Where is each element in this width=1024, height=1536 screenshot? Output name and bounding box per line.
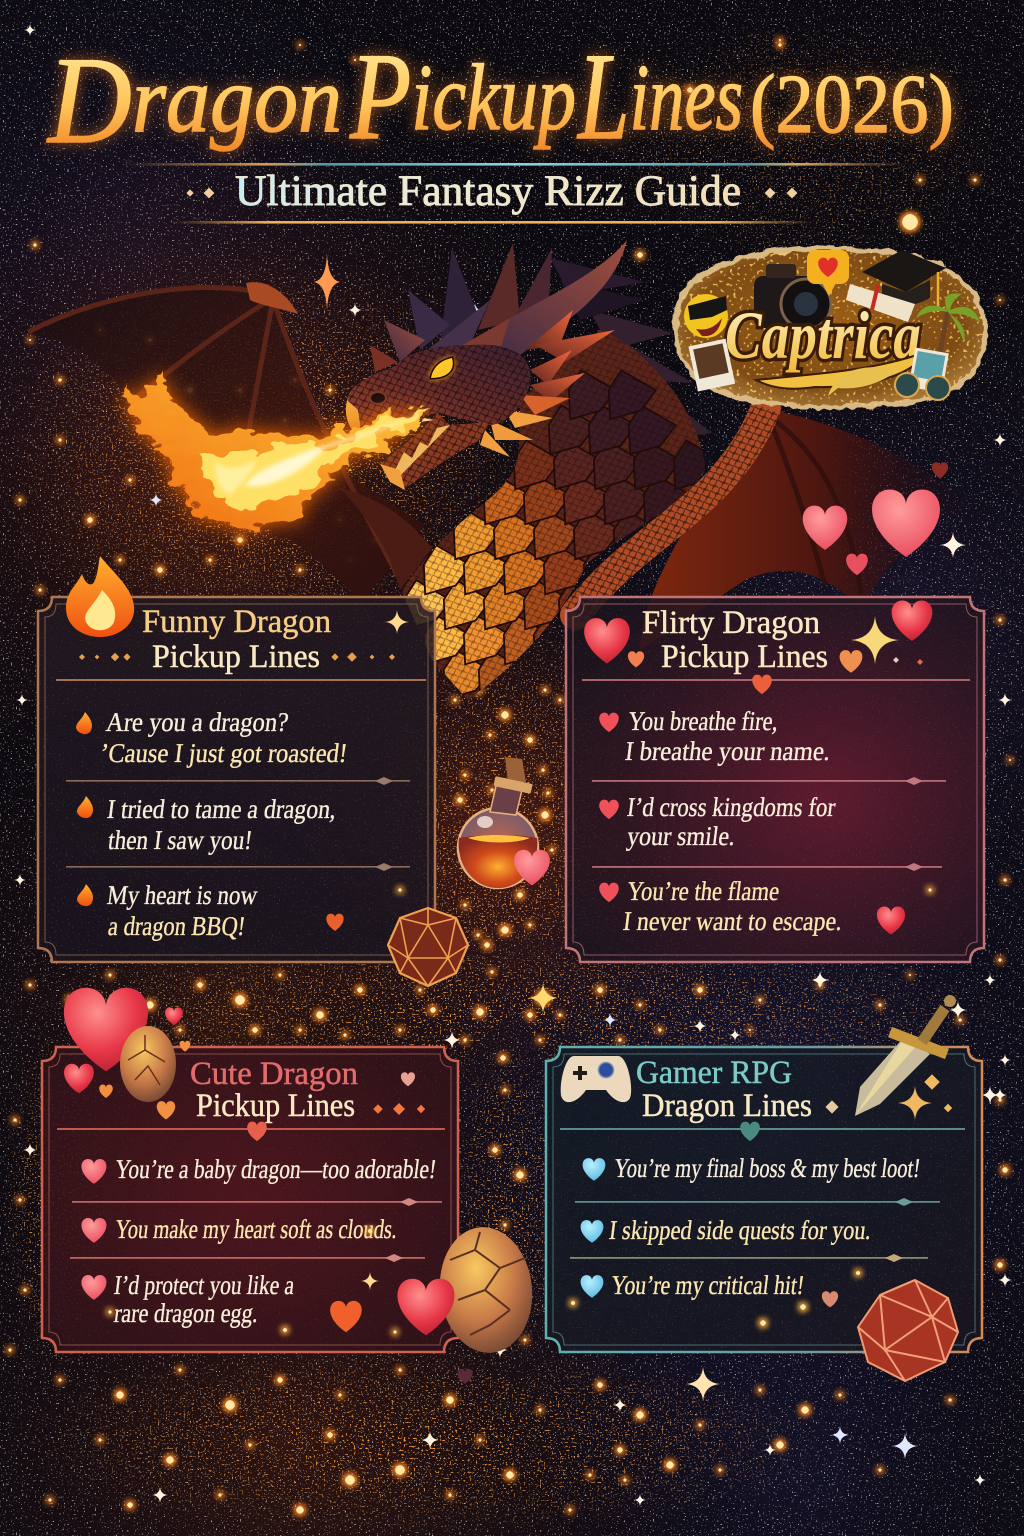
- line 1: Are you a dragon?: [105, 707, 290, 737]
- header ornaments: [157, 1072, 425, 1120]
- logo swoosh: [756, 352, 926, 389]
- nostril: [370, 392, 386, 404]
- line 1: You’re a baby dragon—too adorable!: [114, 1154, 438, 1184]
- panel: flirty dragon pickup lines: [566, 597, 984, 962]
- floating hearts upper right: [803, 462, 948, 575]
- icon: sunglasses emoji: [684, 294, 728, 338]
- dragon illustration: [28, 240, 968, 712]
- icon: camera: [754, 264, 831, 329]
- line 2: your smile.: [626, 821, 737, 851]
- head: [346, 345, 531, 490]
- line 1: I breathe your name.: [624, 736, 832, 766]
- fire breath: [124, 365, 432, 528]
- title rule top: [122, 163, 907, 166]
- line 1: [599, 706, 832, 766]
- line 3: I never want to escape.: [622, 906, 844, 936]
- line 2: [77, 794, 338, 855]
- title: D: [46, 32, 132, 169]
- heading: [190, 1056, 358, 1124]
- ornaments: sparkles: [825, 1074, 952, 1120]
- icons: egg and heart cute bottom: [397, 1223, 538, 1357]
- icon: sword: [855, 995, 956, 1116]
- title: L: [577, 28, 630, 165]
- icon: flame: [66, 556, 134, 637]
- icon: palm tree: [916, 293, 980, 360]
- title: [46, 28, 954, 169]
- icon: graduation cap and scroll: [846, 250, 946, 322]
- right wing: [575, 408, 968, 650]
- icons: hearts and sparkle: [584, 600, 932, 673]
- mane spines: [550, 258, 712, 480]
- heading: Pickup Lines: [152, 639, 320, 675]
- neck and chest: [402, 330, 705, 700]
- icons: heart and egg cute top: [64, 988, 190, 1102]
- title: ragon: [132, 48, 342, 152]
- line 2: I tried to tame a dragon,: [106, 794, 338, 824]
- heading: Dragon Lines: [642, 1088, 812, 1124]
- line 3: I’d protect you like a: [113, 1270, 296, 1300]
- heading: Pickup Lines: [196, 1088, 355, 1124]
- icon: heart bubble: [807, 250, 849, 296]
- line 1: You breathe fire,: [627, 706, 780, 736]
- small heart bottom: [457, 1369, 473, 1384]
- heading: Pickup Lines: [661, 639, 828, 675]
- panel: gamer RPG dragon lines: [546, 995, 982, 1352]
- heading: Flirty Dragon: [642, 605, 820, 641]
- heading: Cute Dragon: [190, 1056, 358, 1092]
- icon: game controller: [561, 1056, 631, 1102]
- subtitle: Ultimate Fantasy Rizz Guide: [235, 168, 741, 215]
- heading: [636, 1055, 812, 1124]
- eye: [431, 358, 453, 378]
- line 3: a dragon BBQ!: [107, 911, 247, 941]
- header ornaments: [79, 652, 395, 662]
- line 3: You’re the flame: [626, 876, 781, 906]
- line 3: [82, 1270, 296, 1328]
- heading: [642, 605, 828, 675]
- line 1: ’Cause I just got roasted!: [99, 738, 349, 768]
- heading: [142, 604, 331, 675]
- line 2: I skipped side quests for you.: [608, 1215, 873, 1245]
- line 3: rare dragon egg.: [113, 1298, 260, 1328]
- title: ickup: [411, 46, 576, 150]
- line 2: I’d cross kingdoms for: [626, 792, 837, 822]
- line 2: [599, 792, 837, 851]
- title rule bottom: [172, 221, 814, 224]
- logo: Captrica badge: [672, 244, 988, 412]
- line 3: [599, 876, 844, 936]
- line 3: [77, 880, 260, 941]
- line 3: You’re my critical hit!: [610, 1270, 806, 1300]
- line 2: then I saw you!: [107, 825, 254, 855]
- icon: potion flask: [458, 757, 550, 888]
- line 2: You make my heart soft as clouds.: [114, 1214, 399, 1244]
- line 1: You’re my final boss & my best loot!: [613, 1153, 922, 1183]
- left wing: [28, 282, 432, 602]
- title: (2026): [750, 58, 954, 151]
- panel: funny dragon pickup lines: [38, 556, 435, 962]
- heading: Gamer RPG: [636, 1055, 792, 1091]
- icon: photo left: [688, 339, 735, 391]
- panel sparkles: [107, 887, 933, 1335]
- logo gold dust: [676, 248, 984, 407]
- horns: [370, 240, 627, 457]
- title: ines: [630, 46, 743, 150]
- title: P: [349, 28, 411, 165]
- icon: d20 die upper: [388, 908, 468, 986]
- panel: cute dragon pickup lines: [42, 1047, 458, 1352]
- line 3: My heart is now: [106, 880, 260, 910]
- heading: Funny Dragon: [142, 604, 331, 640]
- icon: feather: [828, 367, 898, 396]
- icon: d20 die lower: [858, 1280, 958, 1381]
- line 1: [76, 707, 349, 768]
- logo wordmark: Captrica: [725, 297, 921, 373]
- icon: photo right and glasses: [895, 347, 950, 400]
